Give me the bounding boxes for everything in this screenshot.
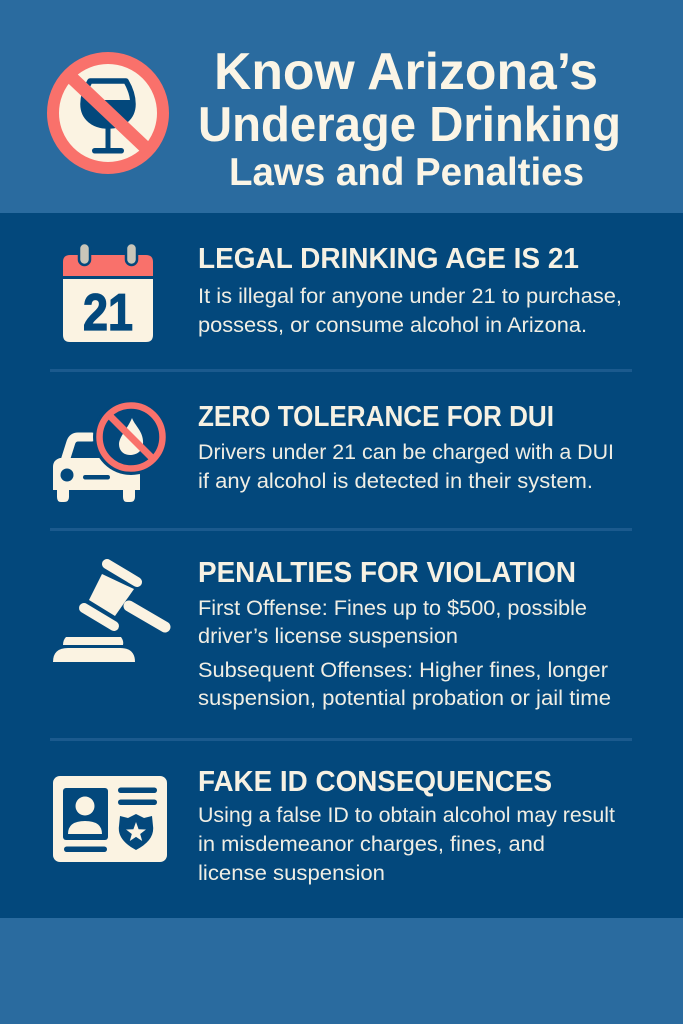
title xyxy=(198,43,621,194)
section: legal drinking age: LEGAL DRINKING AGE IS 21 xyxy=(198,243,579,275)
section: legal drinking age xyxy=(198,243,622,337)
section: fake ID xyxy=(198,766,615,885)
section: fake ID: FAKE ID CONSEQUENCES xyxy=(198,766,552,798)
section: penalties xyxy=(198,557,611,710)
icon: gavel xyxy=(53,564,165,662)
section: zero tolerance: if any alcohol is detected in their system. xyxy=(198,470,593,493)
section: fake ID: in misdemeanor charges, fines, and xyxy=(198,833,545,856)
icon: no alcohol sign xyxy=(53,58,163,168)
title: Laws and Penalties xyxy=(229,151,584,194)
section: legal drinking age: It is illegal for anyone under 21 to purchase, xyxy=(198,285,622,308)
icon: fake ID card xyxy=(53,776,167,862)
icon: calendar 21: 21 xyxy=(83,284,133,342)
section: penalties: suspension, potential probation or jail time xyxy=(198,687,611,710)
title: Underage Drinking xyxy=(198,98,621,152)
section: penalties: PENALTIES FOR VIOLATION xyxy=(198,557,576,589)
section: fake ID: license suspension xyxy=(198,862,385,885)
section: zero tolerance: Drivers under 21 can be charged with a DUI xyxy=(198,441,614,464)
section: penalties: driver’s license suspension xyxy=(198,625,458,648)
section: fake ID: Using a false ID to obtain alcohol may result xyxy=(198,804,615,827)
section: penalties: Subsequent Offenses: Higher fines, longer xyxy=(198,659,608,682)
section: zero tolerance: ZERO TOLERANCE FOR DUI xyxy=(198,401,554,433)
panel: content background xyxy=(0,213,683,918)
section: legal drinking age: possess, or consume alcohol in Arizona. xyxy=(198,314,587,337)
icon: car with no-alcohol sign xyxy=(53,399,169,502)
icon: calendar 21 xyxy=(63,243,153,342)
title: Know Arizona’s xyxy=(214,43,598,101)
section: zero tolerance xyxy=(198,401,614,493)
section: penalties: First Offense: Fines up to $500, possible xyxy=(198,597,587,620)
